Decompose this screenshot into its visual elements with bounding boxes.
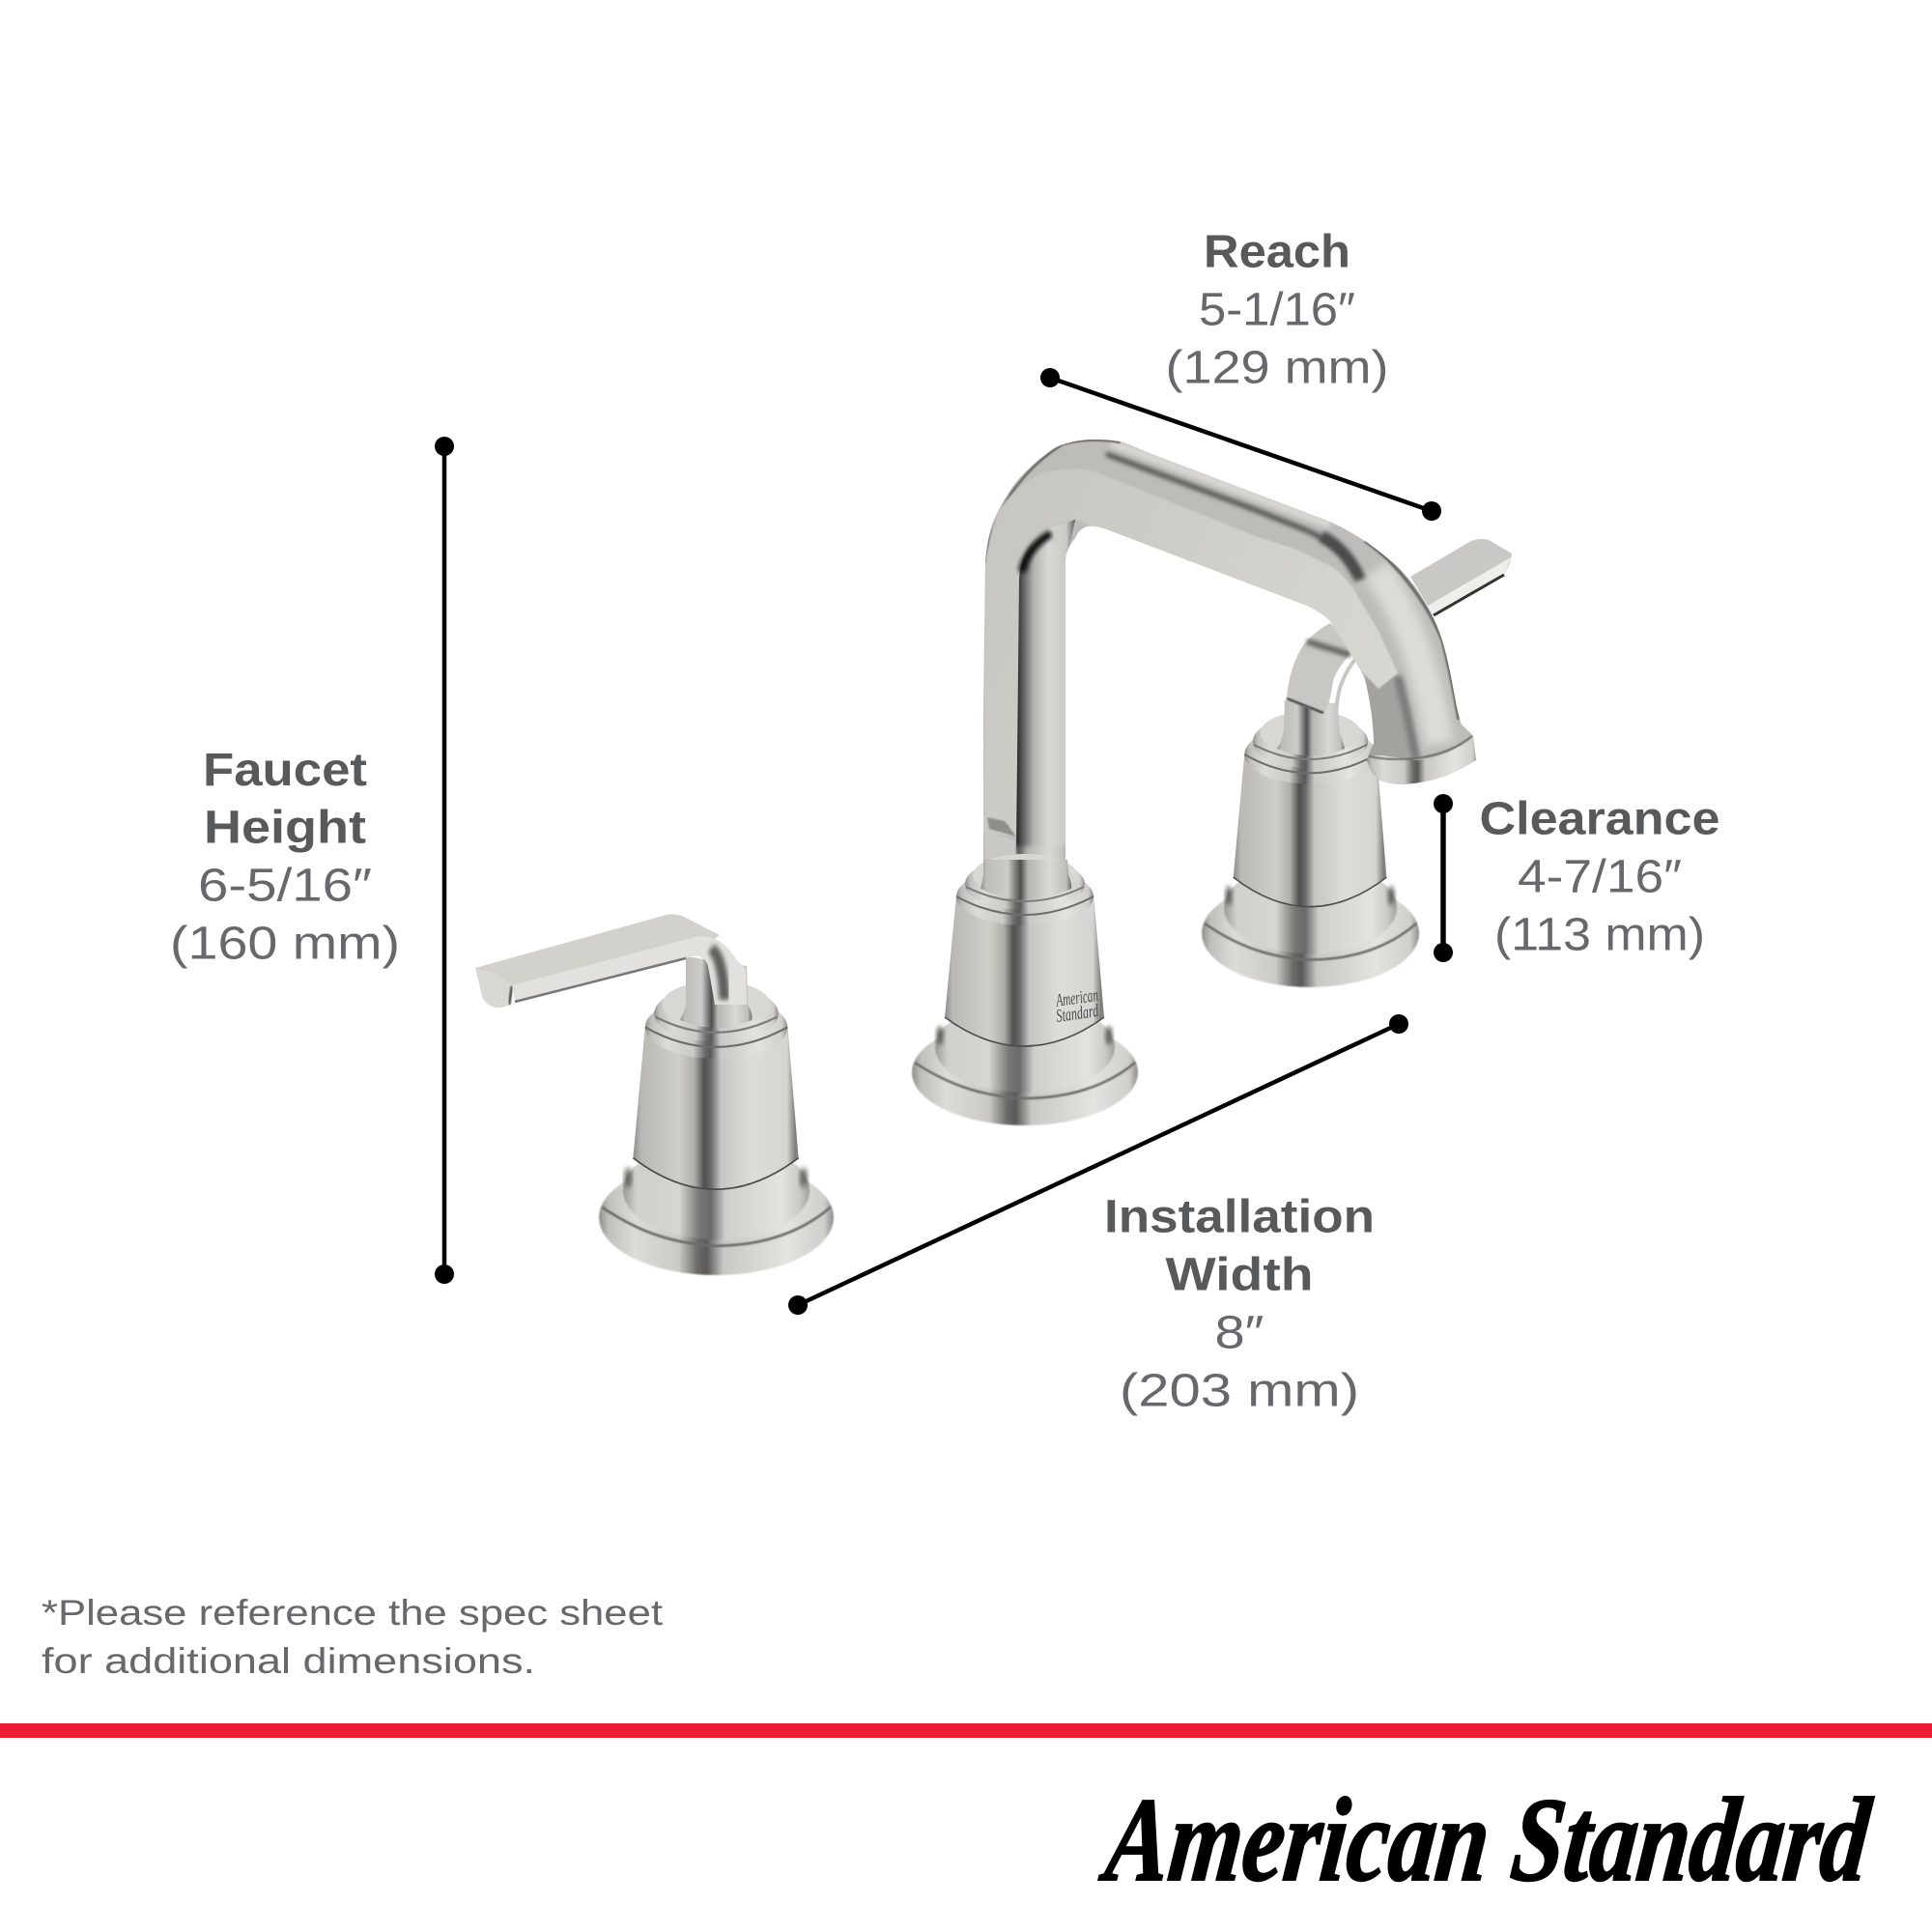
label: reach: Reach [1204, 226, 1350, 278]
engraved brand mark on body: Standard [1055, 1001, 1100, 1027]
footnote [42, 1593, 664, 1681]
icon: main spout [983, 440, 1476, 860]
icon: centre base of spout [912, 854, 1138, 1125]
label: installation width: 8″ [1215, 1308, 1264, 1358]
bell body, centre [912, 854, 1138, 1125]
spout outer edge [1365, 541, 1459, 720]
label: clearance: Clearance [1480, 794, 1719, 844]
spout arch outer edge [985, 440, 1121, 563]
spout outer bend light band [1377, 570, 1439, 744]
red divider bar [0, 1723, 1932, 1738]
icon: right faucet handle [1202, 539, 1512, 987]
dimension: clearance [1434, 794, 1453, 962]
footnote: for additional dimensions. [42, 1641, 535, 1681]
handle lever, left [475, 914, 747, 1008]
flange top edge [1369, 736, 1472, 759]
engraved brand mark on body: American [1054, 985, 1099, 1011]
label: installation width: Width [1165, 1250, 1314, 1300]
vertical tube round side [1016, 520, 1075, 850]
inner arch dark reflection [1022, 533, 1051, 572]
label: reach: 5-1/16″ [1199, 284, 1355, 336]
engraved brand mark on body [1053, 985, 1102, 1027]
label: installation width: Installation [1104, 1192, 1375, 1242]
label: clearance: (113 mm) [1494, 910, 1705, 960]
stem, right [1277, 700, 1345, 755]
handle lever, right [1410, 539, 1512, 615]
label: clearance: 4-7/16″ [1518, 852, 1682, 902]
label: faucet height: 6-5/16″ [198, 860, 372, 912]
spout flat face [983, 469, 1398, 837]
dark band beside nozzle stem [1398, 676, 1416, 758]
handle elbow, right [1287, 623, 1354, 713]
bell body, left [599, 981, 834, 1275]
stem, left [680, 956, 752, 1028]
label: installation width: (203 mm) [1120, 1366, 1359, 1416]
thin arc behind stem [1337, 657, 1357, 729]
footnote: *Please reference the spec sheet [42, 1593, 664, 1633]
dimension: installation width [788, 1014, 1408, 1315]
icon: left faucet handle [475, 914, 834, 1275]
dimension: faucet height [435, 437, 454, 1284]
nozzle flange [1367, 736, 1477, 785]
shade below flat face tip [1364, 674, 1412, 763]
tube joint into collar [980, 860, 1071, 899]
lower notch wedge [984, 831, 1016, 860]
notch shadow [987, 817, 1016, 837]
label: reach: (129 mm) [1165, 342, 1389, 394]
label: faucet height: (160 mm) [170, 918, 400, 970]
spout dark reflection [1106, 454, 1357, 572]
label: reach [1165, 226, 1389, 394]
top strip highlight [1111, 442, 1330, 525]
label: faucet height [170, 745, 400, 970]
spout dark bend [1321, 536, 1360, 580]
label: clearance [1480, 794, 1719, 960]
label: faucet height: Faucet [203, 745, 367, 796]
bell body, right [1202, 711, 1419, 987]
lower tube [1015, 843, 1065, 860]
label: faucet height: Height [204, 802, 366, 854]
label: installation width [1104, 1192, 1375, 1416]
dimension: reach [1040, 368, 1441, 521]
inner arch light spot [1051, 533, 1055, 539]
spout base tone [983, 440, 1476, 860]
